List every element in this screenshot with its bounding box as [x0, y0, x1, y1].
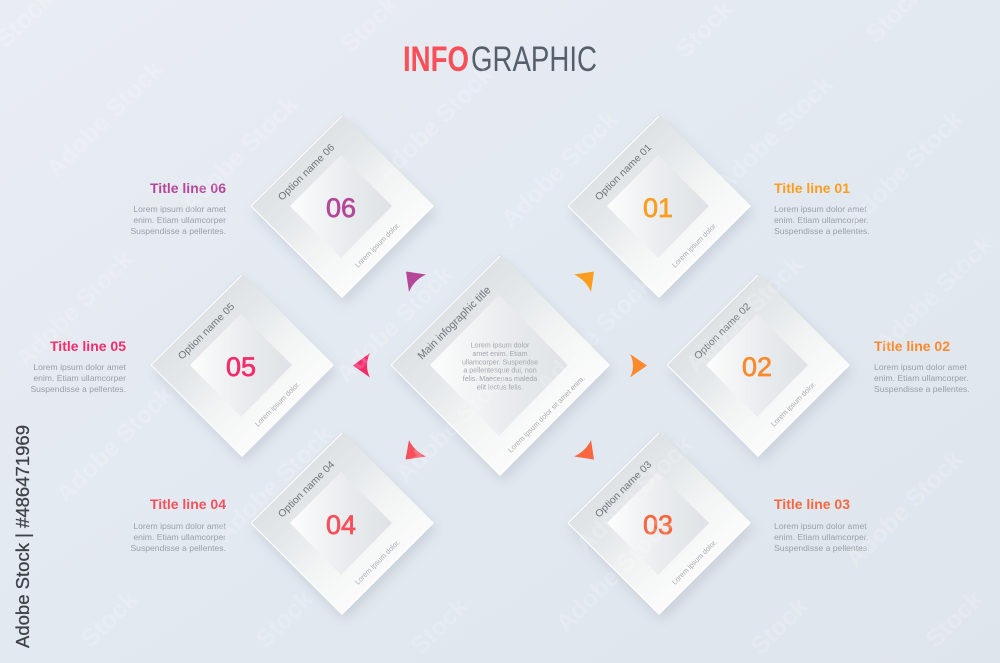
central body text: felis. Maecenas maleda	[463, 375, 537, 383]
central body text: elit lectus felis.	[477, 384, 523, 392]
panel: central diamond	[390, 254, 610, 476]
watermark pattern: Adobe Stock	[50, 380, 178, 508]
panel: option 05: 05	[226, 352, 256, 382]
title	[403, 40, 597, 79]
watermark pattern: Adobe Stock	[680, 250, 808, 378]
panel: option 06	[250, 114, 434, 298]
text block: title line 01: enim. Etiam ullamcorper.	[774, 215, 869, 225]
panel: option 03: 03	[643, 510, 673, 540]
text block: title line 02	[874, 338, 970, 394]
text block: title line 06: Title line 06	[150, 180, 226, 196]
text block: title line 02: Suspendisse a pellentes.	[874, 384, 970, 394]
panel: option 02	[666, 273, 850, 457]
central body text: amet enim. Etiam	[472, 350, 528, 358]
watermark pattern: Adobe Stock	[175, 90, 303, 218]
panel: option 05: Option name 05	[176, 301, 237, 362]
panel: option 02: 02	[742, 352, 772, 382]
arrow: to option 01	[574, 272, 594, 292]
panel: option 05	[150, 273, 334, 457]
text block: title line 05: enim. Etiam ullamcorper	[33, 373, 126, 383]
text block: title line 03: Lorem ipsum dolor amet	[774, 521, 867, 531]
watermark pattern: Adobe Stock	[550, 510, 678, 638]
watermark pattern: Adobe Stock	[330, 260, 458, 388]
panel: option 05: Lorem ipsum dolor.	[253, 380, 302, 428]
panel: option 01: Option name 01	[593, 142, 654, 203]
text block: title line 04: enim. Etiam ullamcorper	[133, 532, 226, 542]
watermark pattern: Adobe Stock	[40, 55, 168, 183]
text block: title line 04: Suspendisse a pellentes.	[130, 543, 226, 553]
watermark pattern: Adobe Stock	[495, 105, 623, 233]
text block: title line 01: Suspendisse a pellentes.	[774, 226, 870, 236]
panel: option 01: 01	[643, 193, 673, 223]
text block: title line 02: enim. Etiam ullamcorper.	[874, 373, 969, 383]
panel: option 04: Lorem ipsum dolor.	[353, 538, 402, 586]
text block: title line 06: Suspendisse a pellentes.	[130, 226, 226, 236]
watermark pattern: Adobe Stock	[710, 70, 838, 198]
watermark pattern: Stock	[75, 585, 143, 653]
panel: option 06: Lorem ipsum dolor.	[353, 221, 402, 269]
central heading: Main infographic title	[416, 284, 493, 362]
text block: title line 06: enim. Etiam ullamcorper	[133, 215, 226, 225]
central body text	[462, 342, 538, 392]
text block: title line 05: Lorem ipsum dolor amet	[33, 362, 127, 372]
text block: title line 03: Title line 03	[774, 496, 850, 512]
panel: option 03: Option name 03	[593, 459, 654, 520]
watermark pattern: Adobe Stock	[210, 420, 338, 548]
watermark pattern: Adobe Stock	[840, 445, 968, 573]
arrow: to option 02	[630, 354, 647, 378]
arrow: to option 06	[406, 272, 426, 292]
watermark pattern: Adobe Stock	[10, 245, 138, 373]
panel: option 02: Lorem ipsum dolor.	[769, 380, 818, 428]
watermark pattern: Stock	[745, 592, 813, 660]
watermark pattern: Adobe Stock	[570, 430, 698, 558]
central body text: ullamcorper. Suspendse	[462, 358, 538, 366]
panel: option 01: Lorem ipsum dolor.	[670, 221, 719, 269]
text block: title line 05	[30, 338, 127, 394]
panel: option 03: Lorem ipsum dolor.	[670, 538, 719, 586]
panel: option 04: 04	[326, 510, 356, 540]
stock id side label: Adobe Stock | #486471969	[13, 425, 33, 648]
text block: title line 05: Title line 05	[50, 338, 126, 354]
watermark pattern: Adobe Stock	[390, 360, 518, 488]
text block: title line 06	[130, 180, 227, 236]
watermark pattern: Stock	[250, 585, 318, 653]
central body text: Lorem ipsum dolor	[471, 342, 530, 350]
arrow: to option 04	[406, 440, 426, 460]
watermark pattern: Adobe Stock	[370, 60, 498, 188]
text block: title line 03: enim. Etiam ullamcorper.	[774, 532, 869, 542]
text block: title line 04: Title line 04	[150, 496, 226, 512]
text block: title line 01	[774, 180, 870, 236]
text block: title line 06: Lorem ipsum dolor amet	[133, 204, 227, 214]
panel: option 04	[250, 431, 434, 615]
central body text: a pellentesque dui, non	[463, 366, 537, 374]
watermark pattern: Stock	[920, 585, 988, 653]
panel: option 06: 06	[326, 193, 356, 223]
panel: option 01	[567, 114, 751, 298]
panel: option 02: Option name 02	[692, 301, 753, 362]
watermark pattern: Adobe Stock	[530, 270, 658, 398]
watermark pattern: Adobe Stock	[870, 230, 998, 358]
watermark pattern: Adobe Stock	[840, 105, 968, 233]
text block: title line 04	[130, 496, 227, 553]
text block: title line 02: Lorem ipsum dolor amet	[874, 362, 967, 372]
panel: option 06: Option name 06	[276, 142, 337, 203]
arrow: to option 05	[353, 353, 370, 378]
watermark pattern: Stock	[405, 592, 473, 660]
text block: title line 03: Suspendisse a pellentes.	[774, 543, 870, 553]
text block: title line 02: Title line 02	[874, 338, 950, 354]
text block: title line 03	[774, 496, 870, 553]
text block: title line 01: Title line 01	[774, 180, 850, 196]
title: GRAPHIC	[471, 40, 597, 79]
text block: title line 04: Lorem ipsum dolor amet	[133, 521, 227, 531]
text block: title line 05: Suspendisse a pellentes.	[30, 384, 126, 394]
title: INFO	[403, 40, 469, 79]
arrow: to option 03	[574, 440, 594, 460]
text block: title line 01: Lorem ipsum dolor amet	[774, 204, 867, 214]
panel: option 03	[567, 431, 751, 615]
central footer text: Lorem ipsum dolor sit amet enim.	[506, 374, 587, 454]
panel: option 04: Option name 04	[276, 459, 337, 520]
